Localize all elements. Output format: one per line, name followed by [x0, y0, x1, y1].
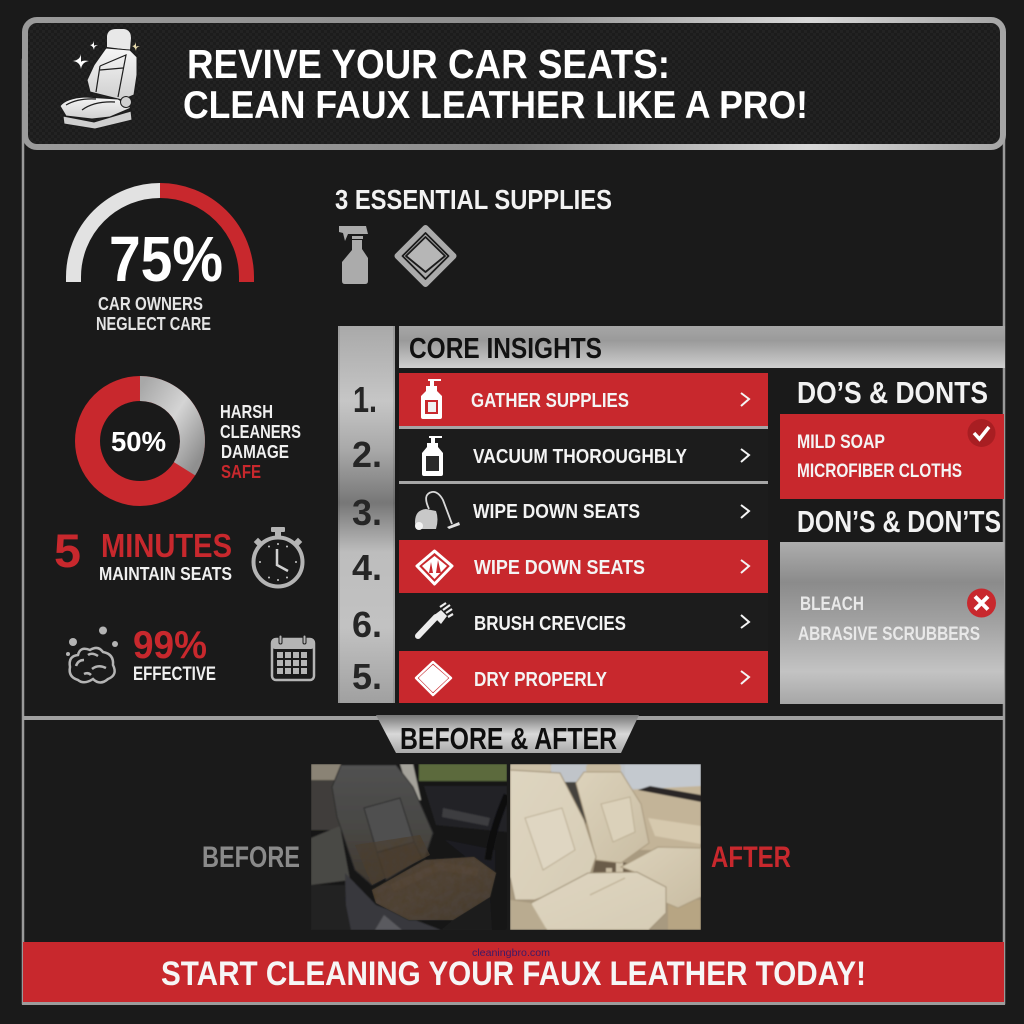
- step row 5: brush crevices: [399, 593, 768, 651]
- stat: 5 minutes: 5: [54, 524, 81, 577]
- step row 2: vacuum thoroughly: VACUUM THOROUGHBLY: [473, 446, 688, 468]
- panel: don'ts: ABRASIVE SCRUBBERS: [798, 624, 980, 645]
- panel: step numbers: 5.: [352, 656, 382, 697]
- call to action banner: [23, 942, 1004, 1002]
- title: CLEAN FAUX LEATHER LIKE A PRO!: [183, 84, 808, 127]
- panel: do's: MICROFIBER CLOTHS: [797, 461, 962, 482]
- icon: pump bottle: [421, 379, 442, 419]
- step row 6: dry properly: DRY PROPERLY: [474, 669, 608, 691]
- icon: wipe diamond: [417, 551, 452, 584]
- stat: 99% effective: [133, 624, 216, 685]
- stat: 50% donut chart: 50%: [111, 426, 166, 457]
- panel: don'ts: BLEACH: [800, 594, 864, 615]
- stat: 50% donut chart: [88, 388, 301, 494]
- stat: 75% gauge: [74, 190, 246, 334]
- title: [183, 41, 808, 127]
- panel: step numbers: 1.: [353, 379, 377, 420]
- stat: 50% donut chart: HARSH: [220, 402, 273, 422]
- step row 5: brush crevices: BRUSH CREVCIES: [474, 613, 626, 635]
- stat: 99% effective: EFFECTIVE: [133, 664, 216, 685]
- icon: vacuum cleaner: [415, 492, 460, 530]
- stat: 75% gauge: CAR OWNERS: [98, 294, 203, 314]
- divider line: [23, 716, 1004, 720]
- step row 3: wipe down seats: [399, 484, 768, 540]
- stat: 50% donut chart: DAMAGE: [221, 442, 289, 462]
- step row 2: vacuum thoroughly: [399, 429, 768, 484]
- core insights heading bar: CORE INSIGHTS: [409, 333, 602, 365]
- panel: step numbers: [338, 326, 395, 703]
- website credit: cleaningbro.com: [472, 948, 550, 959]
- stat: 5 minutes: MAINTAIN SEATS: [99, 564, 232, 584]
- stat: 50% donut chart: SAFE: [221, 462, 261, 482]
- icon: drying cloth: [416, 662, 451, 695]
- call to action banner: START CLEANING YOUR FAUX LEATHER TODAY!: [161, 955, 866, 993]
- stat: 75% gauge: 75%: [109, 223, 223, 295]
- panel: step numbers: 3.: [352, 492, 382, 533]
- stat: 50% donut chart: CLEANERS: [220, 422, 301, 442]
- icon: microfiber cloth: [398, 228, 454, 284]
- step row 1: gather supplies: GATHER SUPPLIES: [471, 390, 629, 412]
- icon: car seat with sparkles: [60, 29, 140, 129]
- icon: brush: [418, 603, 453, 636]
- step row 4: wipe down seats: WIPE DOWN SEATS: [474, 557, 645, 579]
- step row 4: wipe down seats: [399, 540, 768, 593]
- stat: 5 minutes: MINUTES: [101, 527, 232, 564]
- essential supplies heading: 3 ESSENTIAL SUPPLIES: [335, 184, 612, 215]
- stat: 99% effective: 99%: [133, 624, 207, 667]
- header banner: [25, 20, 1003, 147]
- stat: 5 minutes: [54, 524, 232, 584]
- after label: AFTER: [711, 841, 791, 874]
- photo: clean seat after: [510, 764, 701, 930]
- panel: do's: [780, 375, 1004, 499]
- icon: cleaning foam bubbles: [66, 626, 118, 682]
- icon: cross mark: [967, 588, 996, 618]
- step row 3: wipe down seats: WIPE DOWN SEATS: [473, 501, 640, 523]
- icon: soap bottle: [422, 436, 443, 476]
- title: REVIVE YOUR CAR SEATS:: [187, 41, 670, 87]
- icon: calendar: [272, 635, 314, 680]
- panel: do's: DO’S & DONTS: [797, 375, 988, 410]
- icon: stopwatch: [254, 527, 302, 586]
- icon: spray bottle: [339, 226, 368, 284]
- step row 1: gather supplies: [399, 373, 768, 429]
- panel: step numbers: 6.: [352, 604, 382, 645]
- before and after heading tab: BEFORE & AFTER: [400, 721, 617, 756]
- step row 6: dry properly: [399, 651, 768, 703]
- photo: dirty seat before: [311, 764, 507, 930]
- before label: BEFORE: [202, 841, 300, 874]
- icon: check mark: [968, 419, 996, 447]
- panel: step numbers: 4.: [352, 547, 382, 588]
- core insights heading bar: [399, 326, 1005, 368]
- panel: do's: MILD SOAP: [797, 432, 885, 453]
- stat: 75% gauge: NEGLECT CARE: [96, 314, 211, 334]
- panel: step numbers: 2.: [352, 434, 382, 475]
- panel: don'ts: [780, 504, 1004, 704]
